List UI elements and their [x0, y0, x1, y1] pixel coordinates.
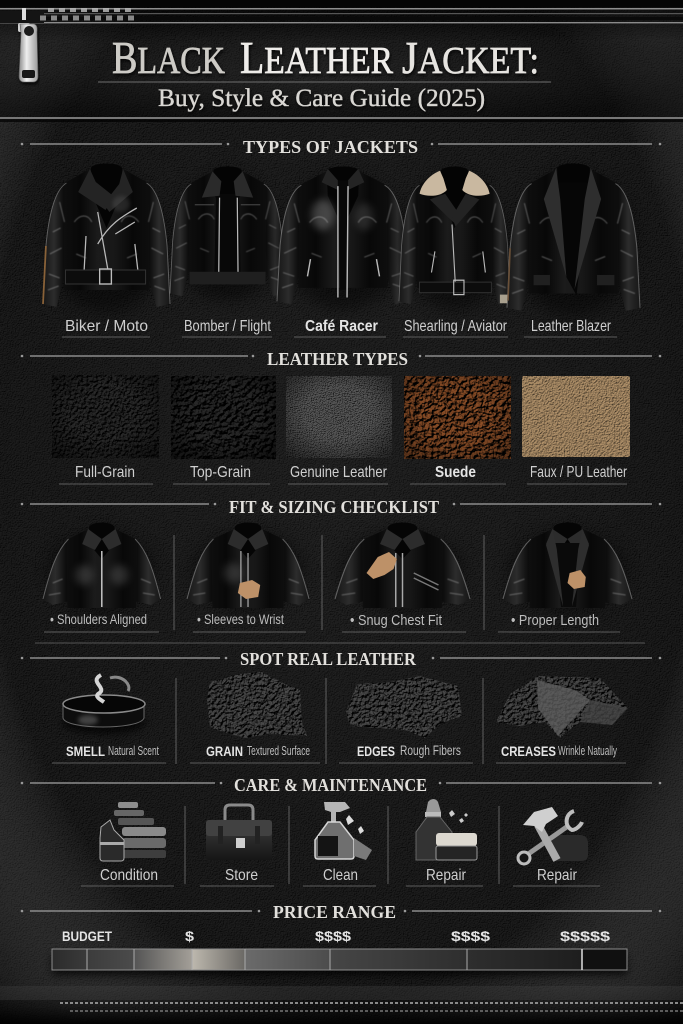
- panel: care and maintenance: [21, 775, 661, 886]
- label: repair tools: Repair: [537, 867, 578, 884]
- swatch: suede: [404, 376, 511, 459]
- panel: leather types: [21, 349, 661, 484]
- jacket: shearling aviator: [399, 166, 510, 309]
- swatch: faux pu leather: [522, 376, 630, 457]
- label: edges rough fibers: EDGES: [357, 743, 395, 759]
- price labels: $: [185, 928, 194, 944]
- heading: price range: PRICE RANGE: [273, 902, 396, 922]
- label: shearling aviator: Shearling / Aviator: [404, 318, 508, 335]
- jacket: biker: [43, 164, 170, 312]
- price range bar: [52, 949, 627, 975]
- panel: types of jackets: [21, 137, 661, 337]
- jacket: cafe racer: [277, 166, 409, 309]
- panel: price range: [21, 902, 661, 975]
- label: leather blazer: Leather Blazer: [531, 318, 612, 335]
- title: BLACK: [112, 33, 225, 83]
- price labels: [62, 928, 610, 944]
- icon: scent tin with smoke: [62, 675, 146, 734]
- label: biker moto: Biker / Moto: [65, 318, 148, 335]
- panel: spot real leather: Textured Surface: [247, 744, 310, 758]
- label: full-grain: Full-Grain: [75, 464, 135, 481]
- label: faux pu leather: Faux / PU Leather: [530, 464, 628, 481]
- jacket: bomber: [170, 166, 285, 301]
- label: sleeves to wrist: • Sleeves to Wrist: [197, 611, 284, 627]
- heading: types of jackets: TYPES OF JACKETS: [243, 137, 418, 157]
- jacket: snug chest fit: [335, 522, 470, 611]
- label: cafe racer: Café Racer: [305, 318, 378, 335]
- title: [112, 33, 539, 83]
- title: JACKET:: [402, 33, 539, 83]
- label: repair: Repair: [426, 867, 467, 884]
- panel: fit and sizing checklist: [21, 497, 661, 643]
- label: suede: Suede: [435, 464, 476, 481]
- title: LEATHER: [240, 33, 394, 83]
- label: condition: Condition: [100, 867, 158, 884]
- label: proper length: • Proper Length: [511, 612, 599, 629]
- price labels: $$$$: [315, 928, 351, 944]
- jacket: sleeves to wrist: [187, 522, 309, 611]
- swatch: genuine leather: [286, 376, 392, 458]
- icon: repair bottle and tin: [416, 799, 477, 860]
- swatch: full-grain: [52, 375, 159, 458]
- price labels: $$$$: [451, 928, 490, 944]
- label: creases wrinkle naturally: CREASES: [501, 743, 556, 759]
- label: store: Store: [225, 867, 258, 884]
- stitching along the bottom edge: [0, 986, 683, 1011]
- icon: clean spray bottle: [315, 802, 372, 860]
- icon: repair hammer and wrench: [518, 807, 588, 864]
- icon: store briefcase: [206, 805, 272, 860]
- icon: condition bottle and cloths: [100, 802, 166, 861]
- label: snug chest fit: • Snug Chest Fit: [350, 612, 443, 629]
- label: genuine leather: Genuine Leather: [290, 464, 388, 481]
- heading: fit and sizing checklist: FIT & SIZING CHECKLIST: [229, 497, 439, 517]
- label: smell natural scent: SMELL: [66, 743, 105, 759]
- icon: zipper pull: [18, 23, 38, 82]
- jacket: leather blazer: [507, 164, 640, 316]
- panel: spot real leather: [21, 649, 661, 764]
- price labels: $$$$$: [560, 928, 610, 944]
- icon: creased leather: [496, 676, 628, 738]
- panel: spot real leather: Wrinkle Natually: [558, 744, 617, 758]
- heading: leather types: LEATHER TYPES: [267, 349, 408, 369]
- swatch: top-grain: [171, 376, 276, 459]
- subtitle: Buy, Style & Care Guide (2025): [158, 85, 485, 112]
- heading: care and maintenance: CARE & MAINTENANCE: [234, 775, 427, 795]
- label: shoulders aligned: • Shoulders Aligned: [50, 611, 147, 627]
- label: clean: Clean: [323, 867, 358, 884]
- panel: spot real leather: Natural Scent: [108, 744, 159, 758]
- icon: edges leather scrap: [346, 676, 462, 738]
- icon: grain leather scrap: [207, 672, 307, 738]
- zipper across the top: [0, 0, 683, 82]
- label: top-grain: Top-Grain: [190, 464, 251, 481]
- heading: spot real leather: SPOT REAL LEATHER: [240, 649, 417, 669]
- label: grain textured surface: GRAIN: [206, 743, 243, 759]
- price labels: BUDGET: [62, 928, 112, 944]
- jacket: shoulders aligned: [43, 522, 161, 611]
- panel: spot real leather: Rough Fibers: [400, 743, 461, 758]
- label: bomber flight: Bomber / Flight: [184, 318, 271, 335]
- jacket: proper length: [503, 522, 632, 611]
